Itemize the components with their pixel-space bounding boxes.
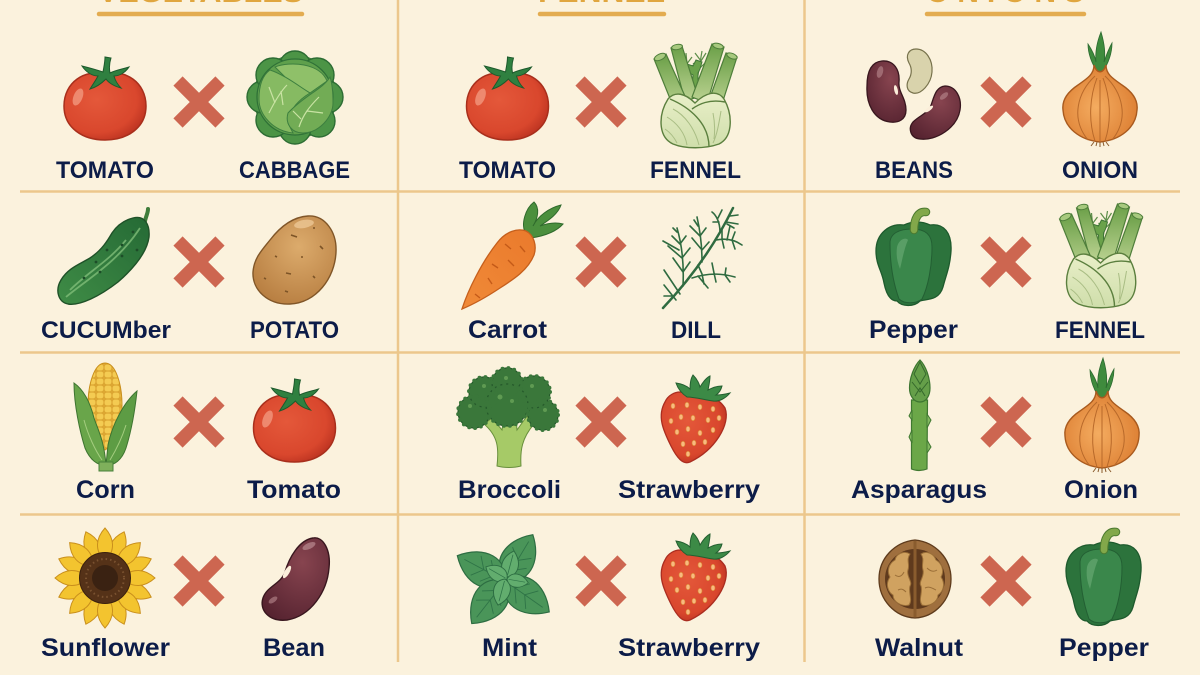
icon: corn [74,363,137,471]
label: beans: BEANS [875,157,953,184]
label: bean: Bean [263,634,325,662]
label: asparagus: Asparagus [851,476,987,504]
icon: sunflower [55,528,155,628]
panel: vegetables column [41,0,350,662]
pair: corn and tomato [74,363,341,504]
icon: potato [253,216,336,304]
label: walnut: Walnut [875,634,964,662]
label: strawberry: Strawberry [618,476,760,504]
pair: mint and strawberry [450,526,760,662]
icon: mint [450,526,559,634]
panel: fennel column [450,0,760,662]
label: cabbage: CABBAGE [239,157,350,184]
icon: fennel [1059,202,1144,308]
icon: walnut [879,540,951,618]
icon: cross mark [985,81,1027,123]
icon: beans [867,49,960,139]
icon: dill [663,208,742,308]
icon: carrot [462,202,563,309]
label: tomato: TOMATO [56,157,154,184]
icon: cross mark [178,401,220,443]
icon: cross mark [178,81,220,123]
label: fennel: FENNEL [1055,317,1145,344]
label: corn: Corn [76,476,135,504]
icon: tomato [64,57,146,140]
icon: strawberry [661,375,730,463]
label: pepper: Pepper [869,316,958,344]
icon: cross mark [580,401,622,443]
label: mint: Mint [482,634,538,662]
label: cucumber: CUCUMber [41,317,171,344]
label: strawberry: Strawberry [618,634,760,662]
label: potato: POTATO [250,317,339,344]
heading: fennel [538,0,665,14]
label: broccoli: Broccoli [458,476,561,504]
icon: cross mark [580,241,622,283]
icon: onion [1063,32,1137,147]
icon: cross mark [985,401,1027,443]
label: sunflower: Sunflower [41,634,170,662]
pair: carrot and dill [462,202,742,344]
label: fennel: FENNEL [650,157,741,184]
label: carrot: Carrot [468,316,548,344]
icon: strawberry [661,533,730,621]
icon: asparagus [909,360,931,470]
pair: pepper and fennel [869,202,1145,344]
pair: tomato and cabbage [56,51,350,184]
icon: broccoli [458,368,558,468]
label: tomato: Tomato [247,476,341,504]
pair: walnut and pepper [875,532,1149,662]
label: tomato: TOMATO [459,157,556,184]
pair: cucumber and potato [41,209,339,344]
pair: asparagus and onion [851,358,1139,504]
icon: tomato [254,379,336,462]
label: dill: DILL [671,317,721,344]
pair: tomato and fennel [459,42,741,184]
pair: beans and onion [867,32,1138,184]
icon: cross mark [178,560,220,602]
icon: cucumber [58,209,149,304]
pair: sunflower and bean [41,528,329,662]
label: pepper: Pepper [1059,634,1149,662]
icon: cross mark [580,560,622,602]
pair: broccoli and strawberry [458,368,760,504]
icon: tomato [466,57,548,140]
icon: cross mark [580,81,622,123]
icon: fennel [653,42,738,148]
icon: onion [1065,358,1139,473]
label: onion: ONION [1062,157,1138,184]
icon: cross mark [178,241,220,283]
icon: pepper [1066,532,1141,626]
panel: onions column [851,0,1149,662]
icon: cross mark [985,560,1027,602]
icon: bean [262,538,329,620]
icon: cabbage [247,51,343,144]
label: onion: Onion [1064,476,1138,504]
icon: cross mark [985,241,1027,283]
icon: pepper [876,212,951,306]
